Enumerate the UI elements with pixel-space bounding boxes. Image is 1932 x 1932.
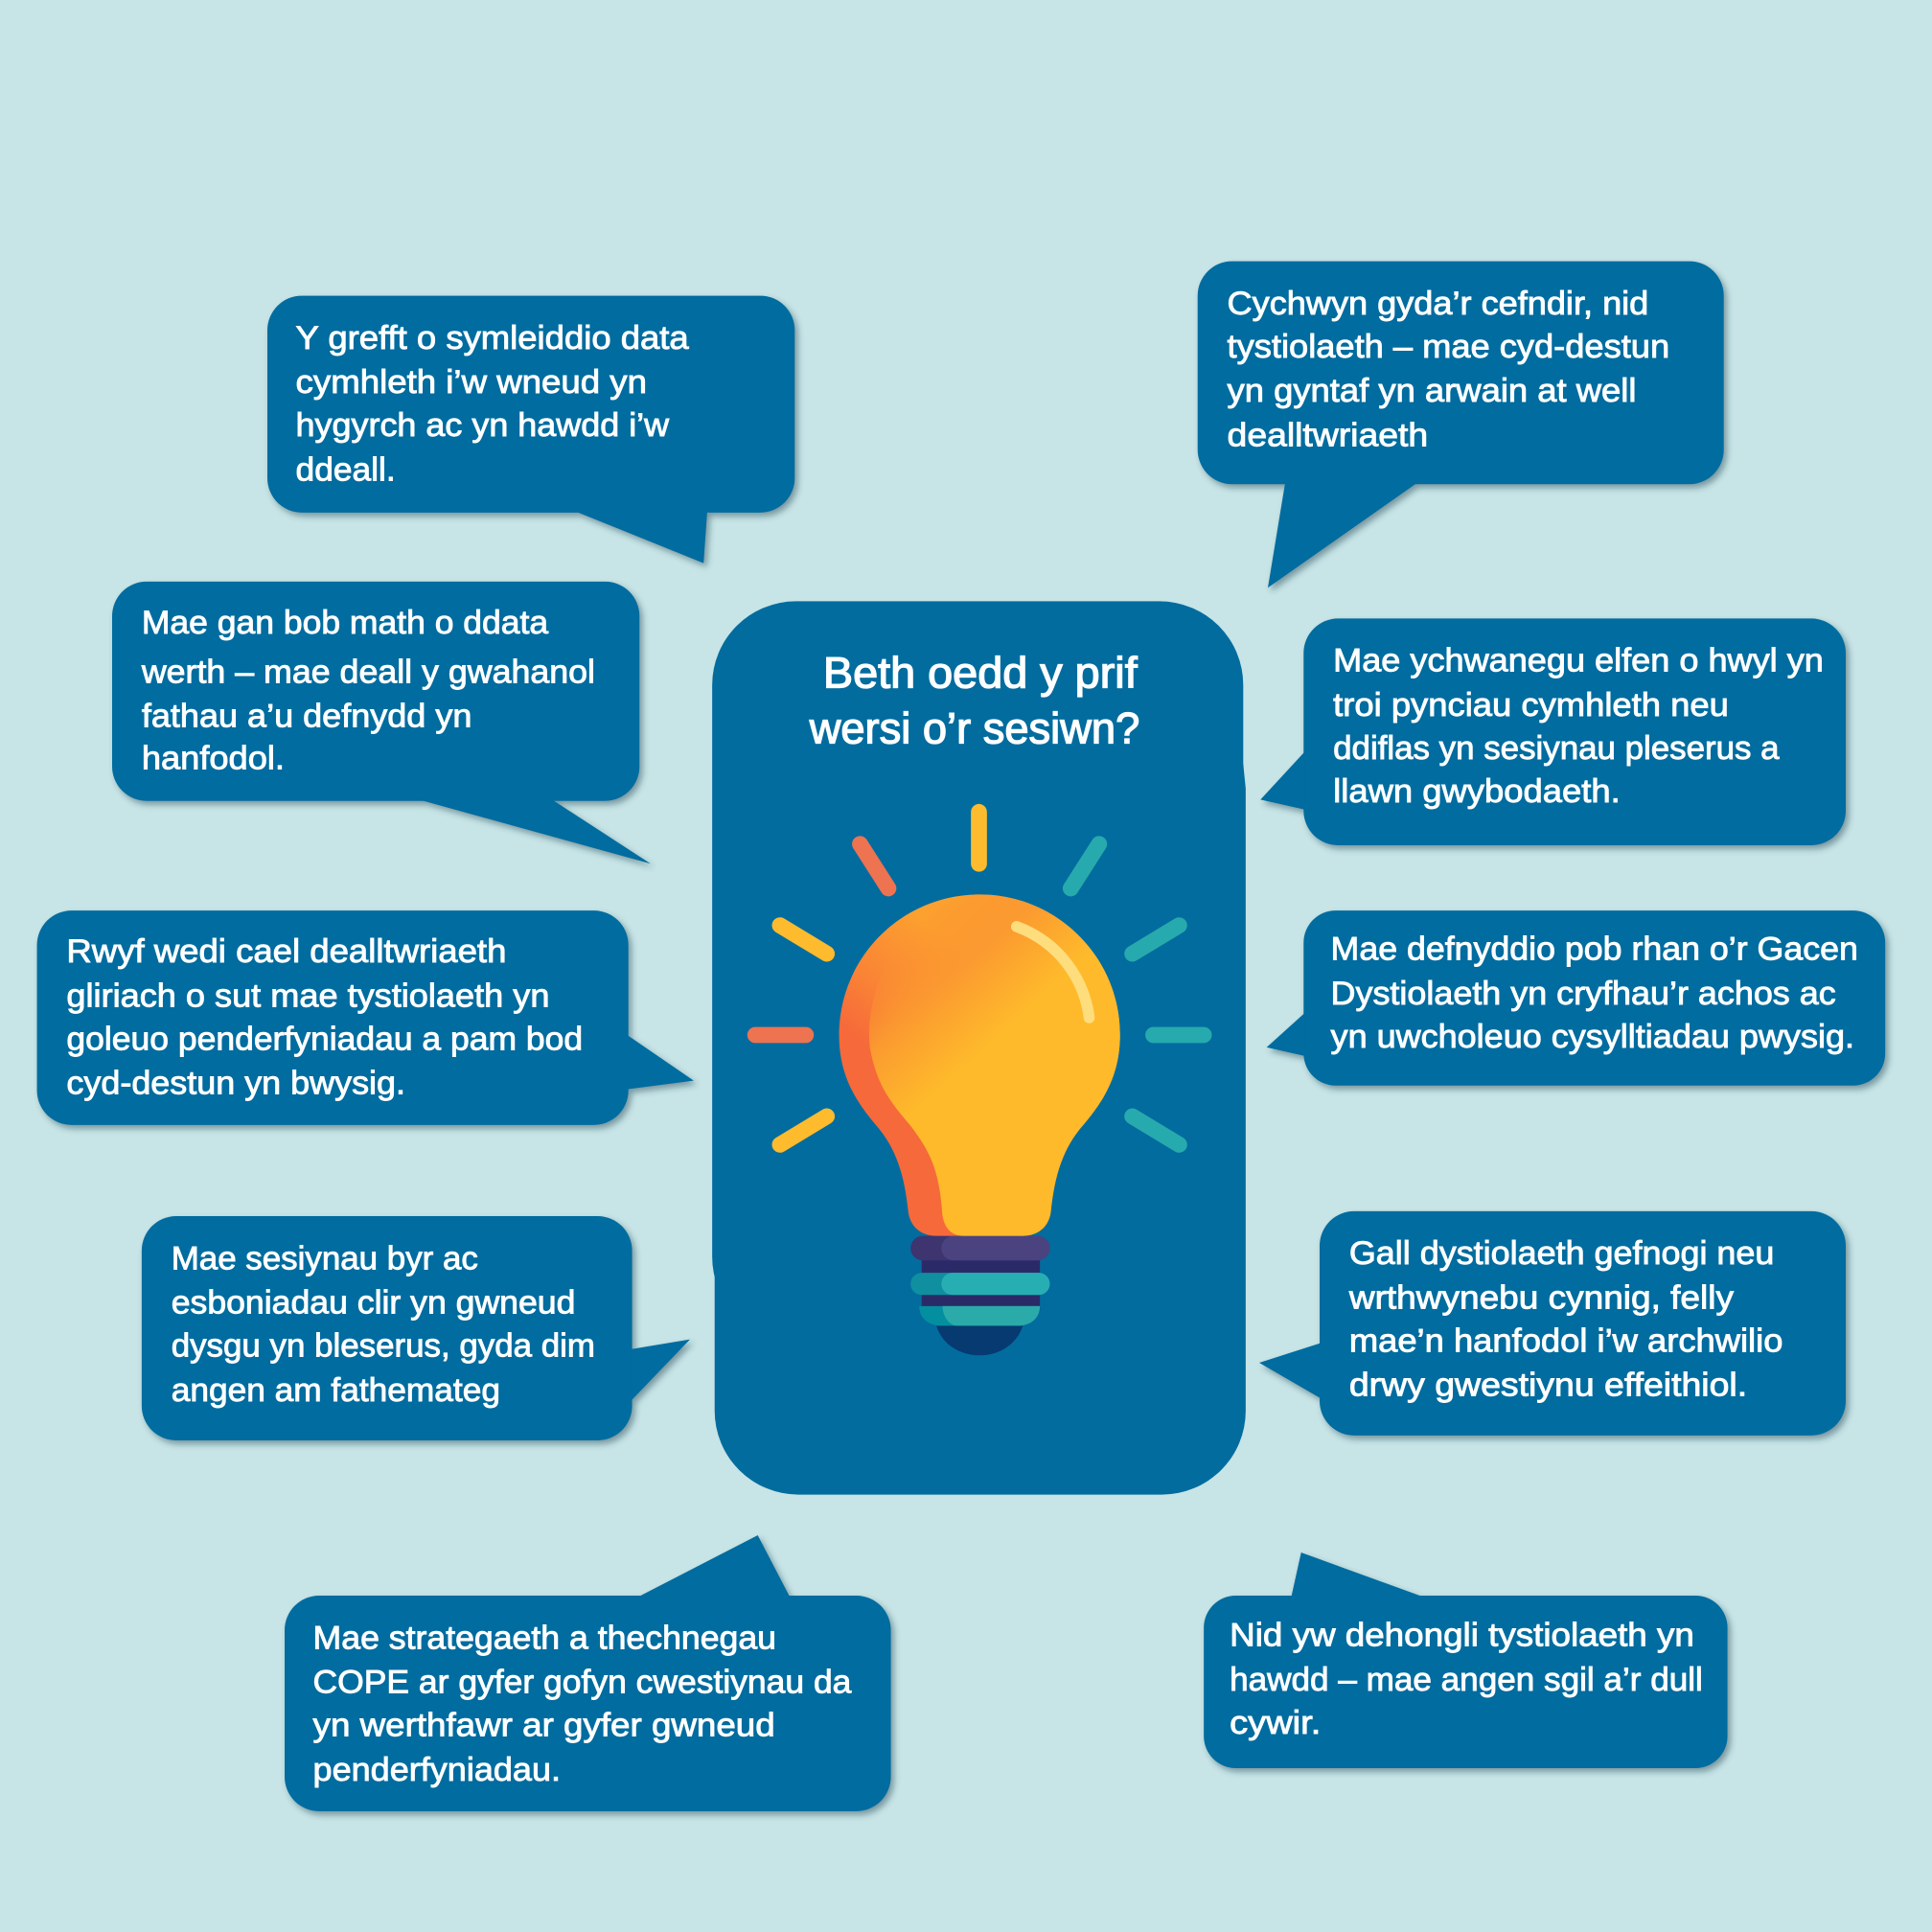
callout text: cyd-destun yn bwysig. <box>66 1066 405 1102</box>
callout: bottom left <box>285 1535 891 1811</box>
callout text: hawdd – mae angen sgil a’r dull <box>1230 1662 1703 1698</box>
callout text <box>66 933 583 1102</box>
callout text: Mae strategaeth a thechnegau <box>313 1620 776 1656</box>
bubble <box>1198 262 1724 587</box>
callout: middle left <box>37 910 694 1125</box>
callout text <box>141 605 595 776</box>
callout text <box>1333 643 1824 810</box>
callout text: wrthwynebu cynnig, felly <box>1348 1279 1735 1316</box>
callout: top left <box>267 296 794 564</box>
heading <box>809 648 1139 752</box>
panel: centre question <box>712 601 1246 1495</box>
callout text: Rwyf wedi cael dealltwriaeth <box>66 933 506 970</box>
callout text: Mae ychwanegu elfen o hwyl yn <box>1333 643 1824 679</box>
callout text: Mae gan bob math o ddata <box>142 605 549 641</box>
callout text: penderfyniadau. <box>313 1752 561 1788</box>
callout text: mae’n hanfodol i’w archwilio <box>1349 1322 1782 1359</box>
bubble <box>1267 910 1885 1086</box>
callout text: hygyrch ac yn hawdd i’w <box>296 407 670 444</box>
callout text: ddiflas yn sesiynau pleserus a <box>1333 730 1780 767</box>
callout: upper right <box>1260 618 1846 845</box>
callout text: dysgu yn bleserus, gyda dim <box>172 1328 595 1365</box>
callout text: COPE ar gyfer gofyn cwestiynau da <box>313 1665 852 1701</box>
callout: middle right <box>1267 910 1885 1086</box>
bubble <box>37 910 694 1125</box>
callout text: yn gyntaf yn arwain at well <box>1228 373 1636 409</box>
bubble <box>142 1216 690 1440</box>
callout text <box>1228 286 1669 453</box>
callout: lower left <box>142 1216 690 1440</box>
callout text <box>1348 1235 1782 1404</box>
callout text: Y grefft o symleiddio data <box>296 320 689 356</box>
callout text: drwy gwestiynu effeithiol. <box>1349 1368 1747 1404</box>
callout text <box>1331 932 1858 1055</box>
callout text: cymhleth i’w wneud yn <box>296 364 647 401</box>
bubble <box>1204 1552 1728 1768</box>
bubble <box>1260 618 1846 845</box>
callout text: goleuo penderfyniadau a pam bod <box>66 1021 583 1057</box>
callout text: tystiolaeth – mae cyd-destun <box>1228 329 1669 365</box>
callout text <box>172 1240 595 1409</box>
panel shape <box>712 601 1246 1495</box>
callout text: Nid yw dehongli tystiolaeth yn <box>1230 1618 1694 1654</box>
callout text <box>313 1620 852 1788</box>
callout text: gliriach o sut mae tystiolaeth yn <box>66 978 549 1014</box>
callout: top right <box>1198 262 1724 587</box>
bulb cap <box>910 1236 1049 1355</box>
bubble <box>285 1535 891 1811</box>
bubble <box>112 582 651 863</box>
heading: wersi o’r sesiwn? <box>809 703 1139 752</box>
callout text: Mae defnyddio pob rhan o’r Gacen <box>1331 932 1858 968</box>
bubble <box>267 296 794 564</box>
callout text: hanfodol. <box>142 740 285 776</box>
callout: upper left <box>112 582 651 863</box>
callout: lower right <box>1259 1211 1846 1436</box>
callout text: yn werthfawr ar gyfer gwneud <box>313 1708 775 1744</box>
callout text: angen am fathemateg <box>172 1372 500 1409</box>
icon: light bulb <box>755 812 1204 1355</box>
callout text: troi pynciau cymhleth neu <box>1333 687 1729 724</box>
callout text: werth – mae deall y gwahanol <box>141 654 595 690</box>
bulb glass <box>840 894 1120 1236</box>
callout text: esboniadau clir yn gwneud <box>172 1285 575 1322</box>
callout text: Cychwyn gyda’r cefndir, nid <box>1228 286 1648 322</box>
callout text: Gall dystiolaeth gefnogi neu <box>1349 1235 1774 1272</box>
icon: light rays <box>755 812 1204 1144</box>
callout text <box>1230 1618 1703 1741</box>
callout text: dealltwriaeth <box>1228 417 1428 453</box>
callout text: yn uwcholeuo cysylltiadau pwysig. <box>1331 1019 1854 1055</box>
callout text: cywir. <box>1230 1705 1321 1741</box>
callout text: Dystiolaeth yn cryfhau’r achos ac <box>1331 976 1836 1012</box>
callout text: fathau a’u defnydd yn <box>142 699 472 735</box>
callout text: llawn gwybodaeth. <box>1333 773 1621 810</box>
callout text: ddeall. <box>296 451 396 488</box>
callout: bottom right <box>1204 1552 1728 1768</box>
bubble <box>1259 1211 1846 1436</box>
callout text: Mae sesiynau byr ac <box>172 1240 478 1276</box>
heading: Beth oedd y prif <box>823 648 1138 697</box>
callout text <box>296 320 689 488</box>
